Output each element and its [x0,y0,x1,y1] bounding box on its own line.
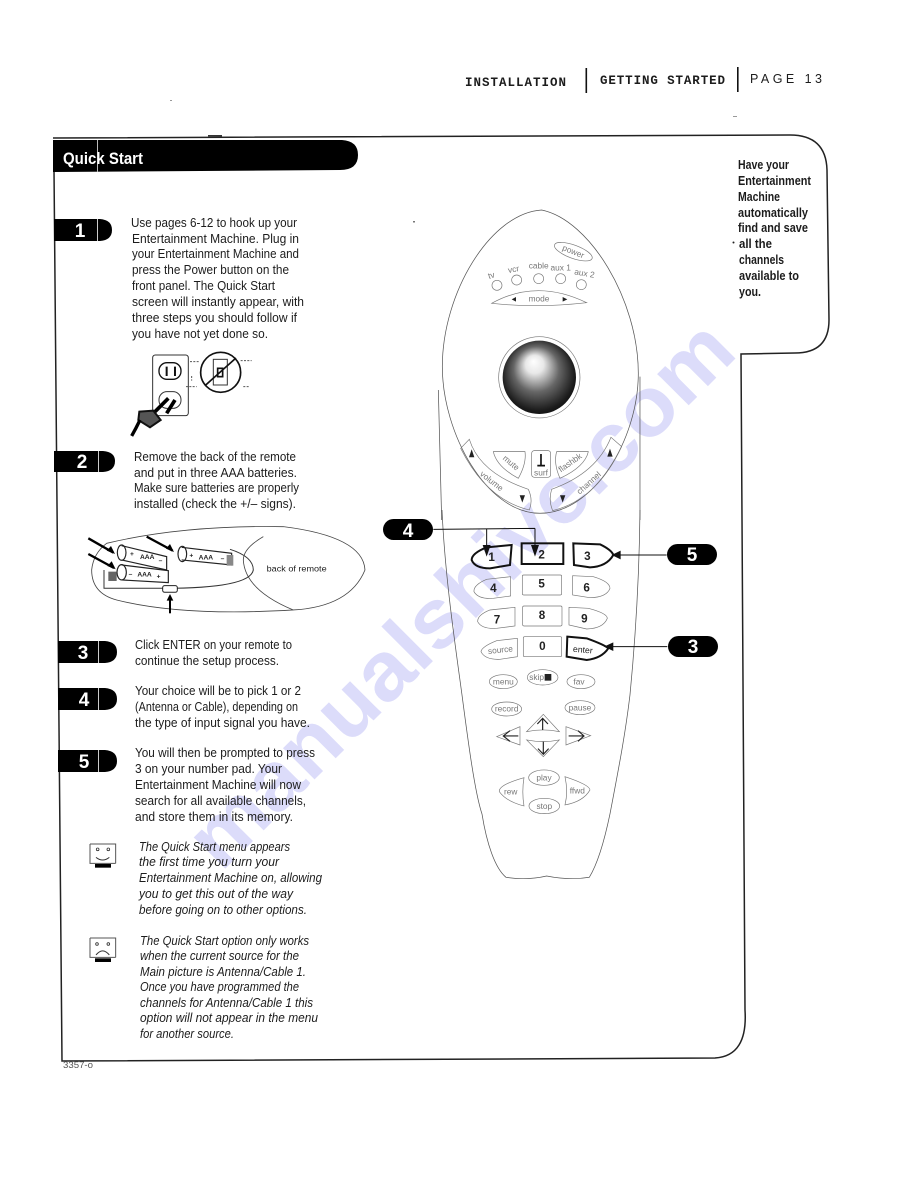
number buttons 4 to 9 and 0: 9 [581,612,588,625]
step 5 text: and store them in its memory. [135,810,293,824]
playback buttons: play [536,773,552,783]
page header: INSTALLATION [465,76,566,90]
playback buttons: rew [504,786,518,796]
step 5 text [135,746,315,824]
number buttons 4 to 9 and 0: 0 [539,640,546,653]
remote control: upper section [438,210,640,520]
title bar [53,140,358,172]
sidebar tip: channels [739,253,784,267]
caution note [140,934,318,1041]
arrow pad [497,714,591,757]
title bar: Quick Start [63,149,143,168]
mode indicators: aux 2 [574,266,596,280]
volume rocker: volume [478,469,506,493]
playback buttons: stop [536,801,553,811]
mode button: mode [529,294,550,304]
remote control: lower section [433,510,667,879]
sidebar tip: find and save [738,221,808,235]
positive note: you to get this out of the way [138,887,294,901]
enter button [567,637,608,660]
step 3 text: Click ENTER on your remote to [135,638,292,652]
menu, skip and fav buttons: fav [573,676,585,686]
button 3 [573,543,613,567]
button 2: 2 [538,548,545,561]
step 2 text [134,450,300,511]
step 1 text: Use pages 6-12 to hook up your [131,216,297,230]
caution note: Main picture is Antenna/Cable 1. [140,965,306,979]
step 1 text: your Entertainment Machine and [132,247,299,261]
remote lower body outline [442,510,640,879]
callout pill 5: 5 [687,545,698,566]
number buttons 4 to 9 and 0: 6 [583,581,590,594]
sidebar tip: available to [739,269,799,283]
source button: source [487,643,514,656]
step 5 text: search for all available channels, [135,794,306,808]
step 1 tab [54,219,112,242]
mode indicators: vcr [507,263,520,275]
mode button [492,291,587,306]
page header: PAGE 13 [750,72,822,86]
step 3 text: continue the setup process. [135,654,279,668]
icon: frowning face [90,938,116,962]
mode indicators: aux 1 [550,262,571,272]
step 4 text: the type of input signal you have. [135,716,310,730]
step 1 text: front panel. The Quick Start [132,279,275,293]
button 1 [472,545,512,568]
mode indicators [487,260,596,290]
caution note: The Quick Start option only works [140,934,309,948]
enter button: enter [573,644,593,656]
step 1 text: screen will instantly appear, with [132,295,304,309]
step 1 text: press the Power button on the [132,263,289,277]
step 1 text [131,216,304,341]
caution note: when the current source for the [140,949,299,963]
step 4 text [135,684,310,730]
step 1 text: you have not yet done so. [132,327,268,341]
sidebar tip: all the [739,237,772,251]
step 3 text [135,638,292,668]
icon: wall outlet and plug [132,352,252,436]
callout pill 4: 4 [403,521,414,542]
caution note: channels for Antenna/Cable 1 this [140,996,313,1010]
page header: GETTING STARTED [600,74,725,88]
positive note: Entertainment Machine on, allowing [139,871,322,885]
trackball [499,337,580,418]
sidebar tip: automatically [738,206,808,220]
footer code: 3357-o [63,1060,93,1070]
menu, skip and fav buttons [489,670,595,689]
diagram: batteries in back of remote: + [189,552,193,559]
caution note: option will not appear in the menu [140,1011,318,1025]
number buttons 4 to 9 and 0: 5 [538,578,545,591]
step 2 tab: 2 [77,452,87,473]
flashback button [556,450,588,478]
content frame [53,135,829,1061]
playback buttons: ffwd [570,785,585,795]
positive note: the first time you turn your [139,855,280,869]
channel rocker [550,437,622,511]
diagram: batteries in back of remote: – [159,558,163,565]
number buttons 4 to 9 and 0: 8 [539,609,546,622]
diagram: batteries in back of remote: AAA [137,572,152,579]
flashback button: flashbk [556,450,584,474]
menu, skip and fav buttons: skip [529,672,544,682]
power button: power [561,242,586,260]
menu, skip and fav buttons: menu [493,676,514,686]
mute button: mute [501,453,522,473]
diagram: batteries in back of remote: – [129,571,133,578]
sidebar tip: you. [739,285,761,299]
caution note: Once you have programmed the [140,980,299,994]
step 4 text: Your choice will be to pick 1 or 2 [135,684,301,698]
power button [552,239,594,265]
step 2 text: and put in three AAA batteries. [134,466,297,480]
diagram: batteries in back of remote: + [157,574,161,581]
step 3 tab: 3 [78,643,88,664]
number buttons 4 to 9 and 0 [474,575,610,657]
mode indicators: tv [487,269,496,281]
step 2 tab [54,451,115,473]
watermark: manualshive.com [167,301,752,886]
diagram: batteries in back of remote: AAA [199,554,213,561]
sidebar tip: Entertainment [738,174,812,188]
number buttons 4 to 9 and 0: 7 [494,613,500,626]
record and pause buttons: pause [569,702,592,712]
mode indicators: cable [529,260,549,270]
callout pill 5 [667,544,717,566]
step 1 text: three steps you should follow if [132,311,298,325]
button 2 [522,543,563,564]
diagram: batteries in back of remote [88,527,365,613]
page header [465,67,822,93]
step 5 text: 3 on your number pad. Your [135,762,282,776]
step 5 text: You will then be prompted to press [135,746,315,760]
remote outline [438,210,640,520]
record and pause buttons: record [495,704,519,714]
callout pill 3 [668,636,718,658]
diagram: batteries in back of remote: back of remote [267,564,327,574]
step 2 text: Remove the back of the remote [134,450,296,464]
step 1 text: Entertainment Machine. Plug in [132,232,299,246]
diagram: batteries in back of remote: – [221,556,225,563]
step 4 text: (Antenna or Cable), depending on [135,700,298,714]
step 4 tab: 4 [79,690,90,711]
sidebar tip [732,158,812,299]
sidebar tip: Have your [738,158,789,172]
callout arrows [433,528,667,651]
step 3 tab [58,641,117,664]
button 3: 3 [584,550,591,563]
source button [481,638,517,659]
step 5 tab [58,750,117,773]
positive note: The Quick Start menu appears [139,840,290,854]
callout pill 3: 3 [688,637,698,658]
step 4 tab [58,688,117,711]
step 2 text: Make sure batteries are properly [134,481,300,495]
caution note: for another source. [140,1027,234,1041]
step 2 text: installed (check the +/– signs). [134,497,296,511]
step 5 text: Entertainment Machine will now [135,778,302,792]
sidebar tip: Machine [738,190,780,204]
surf button: surf [534,467,549,477]
step 1 tab: 1 [75,221,86,242]
mute button [493,452,525,478]
step 5 tab: 5 [79,752,90,773]
callout pill 4 [383,519,433,542]
surf button [532,451,551,477]
positive note: before going on to other options. [139,903,307,917]
diagram: batteries in back of remote: + [130,551,134,558]
playback buttons [499,770,590,814]
record and pause buttons [492,701,595,716]
diagram: batteries in back of remote: AAA [140,554,155,561]
number buttons 4 to 9 and 0: 4 [490,582,497,595]
volume rocker [461,439,531,510]
button 1: 1 [488,551,495,564]
icon: smiling face [90,844,116,868]
channel rocker: channel [574,469,603,496]
positive note [138,840,322,917]
